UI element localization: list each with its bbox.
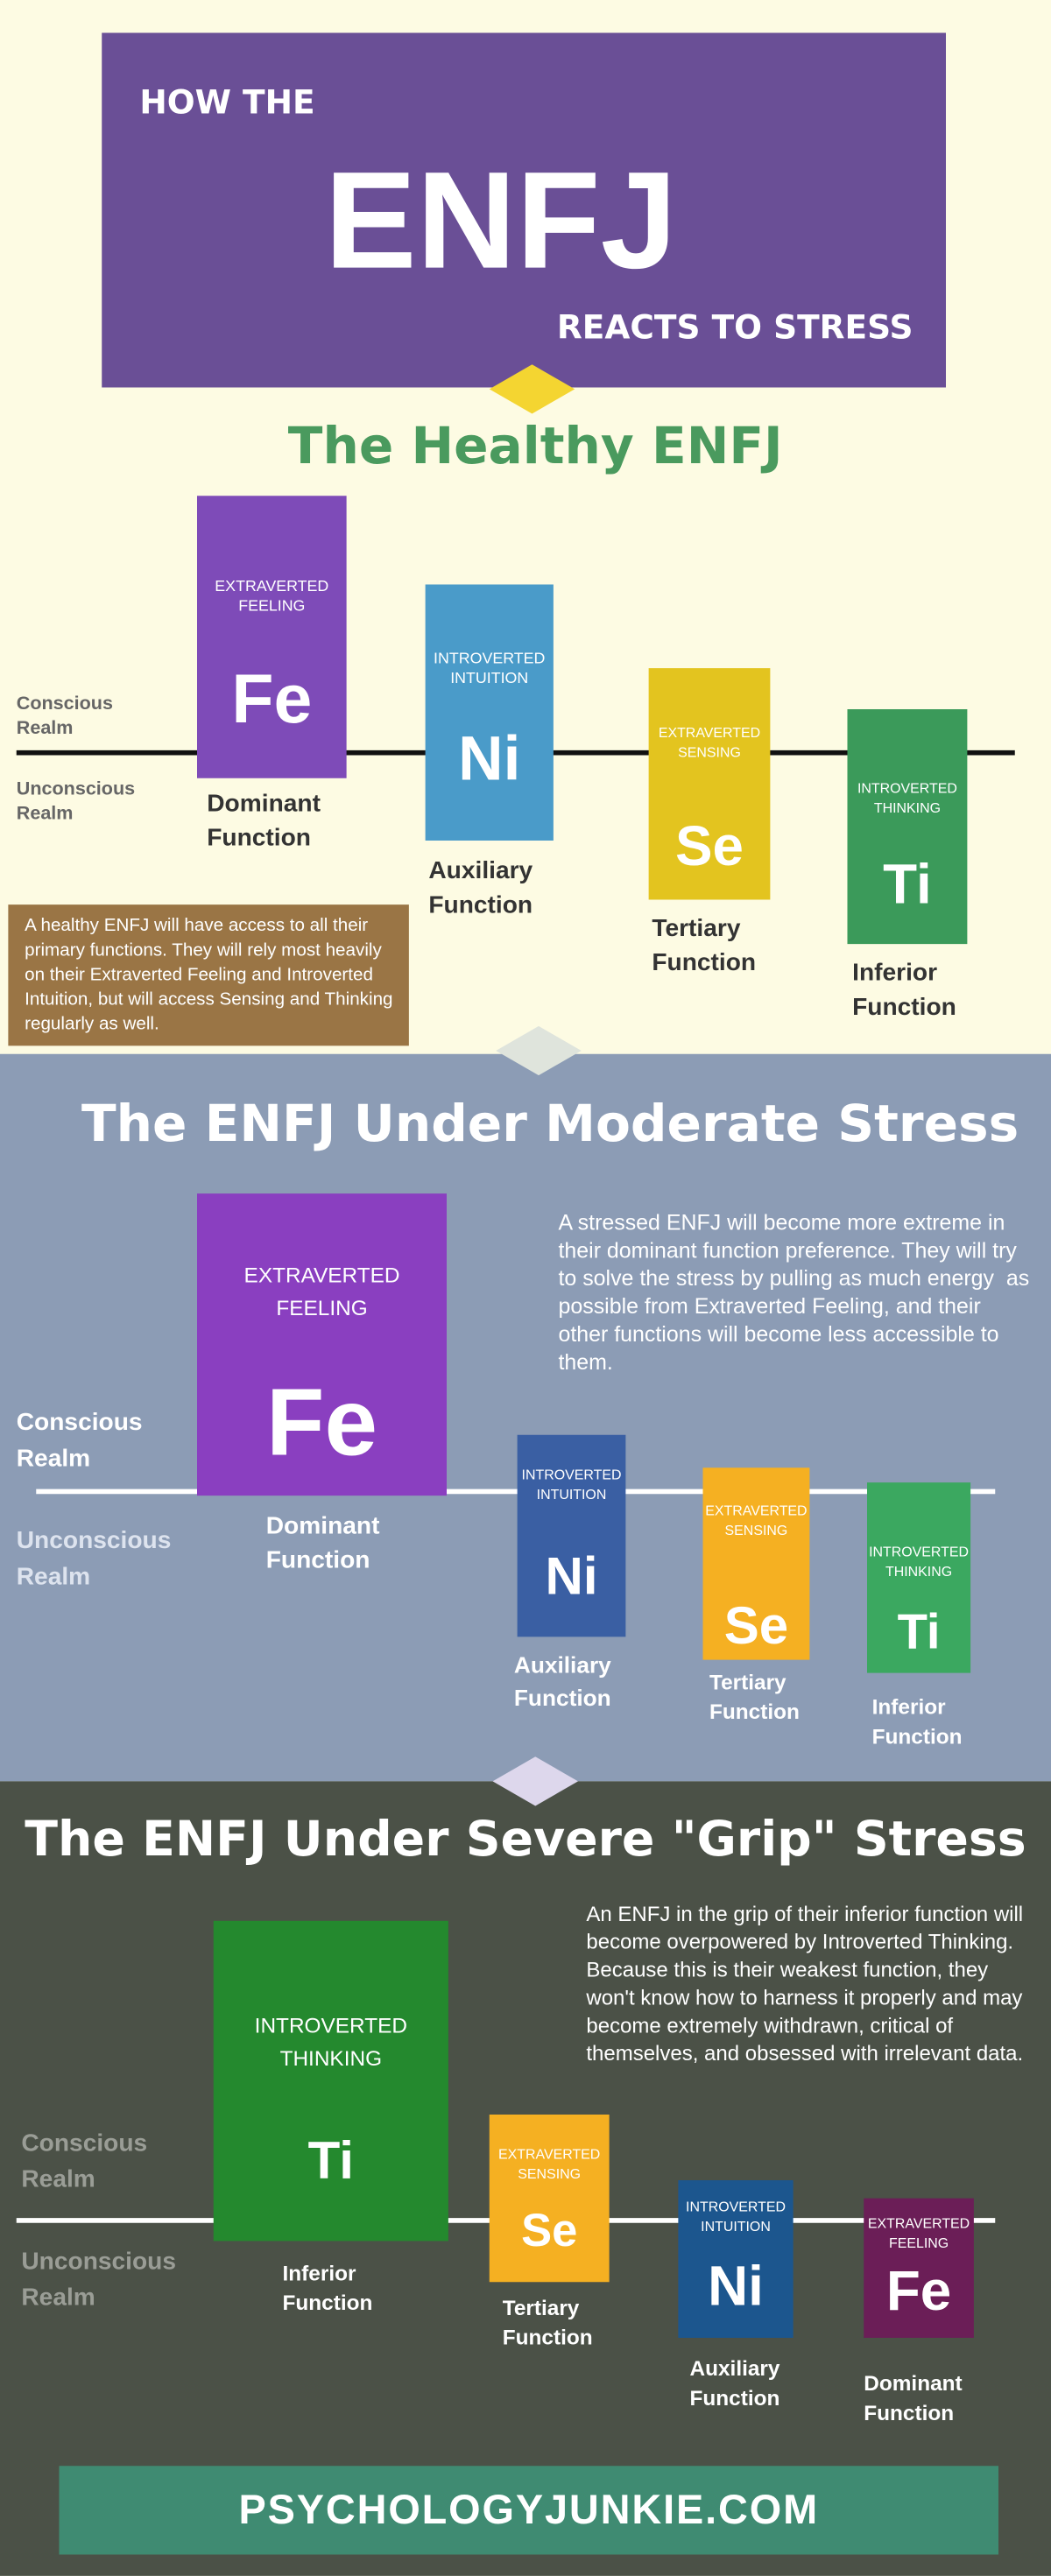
Ni box moderate: INTROVERTED	[522, 1466, 621, 1482]
description grip: An ENFJ in the grip of their inferior function will become overpowered by Introverted Thinking. Because this is their weakest function, they won't know how to harness it properly and may become extremely withdrawn, critical of themselves, and obsessed with irrelevant data.	[586, 1901, 1023, 2066]
Fe box grip: EXTRAVERTED	[868, 2214, 970, 2231]
Ti box healthy	[848, 709, 967, 944]
Se box healthy: EXTRAVERTED	[659, 724, 760, 741]
label tertiary	[652, 914, 756, 977]
Se box moderate: Se	[724, 1595, 788, 1655]
realm grip	[21, 2129, 176, 2312]
Ni box healthy: INTUITION	[450, 670, 528, 688]
Se box healthy	[649, 668, 770, 900]
Ti box grip: INTROVERTED	[255, 2013, 407, 2038]
label auxiliary: Auxiliary	[690, 2356, 779, 2381]
Ti box grip	[214, 1921, 448, 2241]
Ni box grip: Ni	[708, 2256, 764, 2319]
panel: grip stress	[0, 1781, 1051, 2576]
label inferior: Inferior	[872, 1694, 946, 1719]
Ni box grip: INTUITION	[701, 2218, 771, 2235]
Fe box healthy	[197, 496, 347, 778]
diamond yellow	[489, 364, 575, 413]
Ti box healthy: THINKING	[874, 799, 941, 816]
Se box moderate: SENSING	[725, 1522, 787, 1538]
Se box moderate: EXTRAVERTED	[705, 1503, 808, 1518]
title box	[102, 33, 946, 387]
realm grip: Realm	[21, 2165, 95, 2193]
realm moderate: Conscious	[17, 1409, 143, 1437]
realm labels healthy	[17, 694, 135, 824]
label tertiary: Function	[652, 949, 756, 977]
label inferior	[872, 1694, 963, 1749]
label inferior: Function	[282, 2291, 372, 2315]
heading grip: The ENFJ Under Severe "Grip" Stress	[25, 1811, 1026, 1867]
description moderate: A stressed ENFJ will become more extreme in their dominant function preference. They will try to solve the stress by pulling as much energy as possible from Extraverted Feeling, and their other functions will become less accessible to them.	[559, 1210, 1029, 1374]
label inferior: Inferior	[852, 959, 937, 987]
realm labels healthy: Conscious	[17, 694, 113, 714]
realm grip: Conscious	[21, 2129, 147, 2157]
label auxiliary	[514, 1651, 611, 1711]
text box healthy: A healthy ENFJ will have access to all their primary functions. They will rely most heavily on their Extraverted Feeling and Introverted Intuition, but will access Sensing and Thinking regularly as well.	[25, 916, 393, 1034]
label tertiary: Function	[709, 1700, 800, 1724]
label dominant: Function	[864, 2400, 954, 2425]
Se box grip: SENSING	[518, 2165, 581, 2182]
realm labels healthy: Realm	[17, 805, 73, 824]
label dominant	[207, 790, 321, 852]
label inferior: Inferior	[282, 2261, 356, 2285]
Fe box moderate: Fe	[266, 1369, 377, 1476]
Ni box grip	[678, 2180, 794, 2338]
Ni box moderate: INTUITION	[537, 1486, 606, 1503]
label tertiary: Function	[503, 2325, 593, 2349]
Se box healthy: Se	[675, 816, 744, 878]
Ti box moderate: INTROVERTED	[869, 1543, 969, 1559]
title: ENFJ: ENFJ	[325, 143, 677, 297]
Ni box healthy: INTROVERTED	[434, 650, 545, 668]
Fe box healthy: EXTRAVERTED	[215, 578, 328, 596]
label inferior: Function	[872, 1724, 963, 1749]
label tertiary	[503, 2295, 593, 2349]
Se box grip	[490, 2115, 610, 2282]
realm moderate: Realm	[17, 1563, 90, 1591]
title: how the: HOW THE	[139, 82, 315, 122]
label inferior	[852, 959, 956, 1021]
realm labels healthy: Realm	[17, 719, 73, 739]
title: reacts to stress: REACTS TO STRESS	[557, 307, 913, 347]
label dominant: Dominant	[207, 790, 321, 818]
Ni box moderate	[518, 1435, 625, 1636]
panel: moderate stress	[0, 1054, 1051, 1781]
label dominant: Dominant	[266, 1512, 379, 1540]
Ti box moderate	[867, 1482, 970, 1673]
Se box grip: Se	[521, 2205, 577, 2256]
Se box grip: EXTRAVERTED	[498, 2146, 600, 2162]
label auxiliary	[690, 2356, 779, 2410]
label inferior: Function	[852, 993, 956, 1021]
label dominant	[864, 2371, 963, 2425]
label auxiliary: Function	[428, 891, 533, 919]
Fe box moderate: EXTRAVERTED	[244, 1263, 399, 1287]
heading moderate: The ENFJ Under Moderate Stress	[81, 1095, 1019, 1154]
diamond	[496, 1026, 582, 1075]
Ti box grip: THINKING	[280, 2045, 382, 2070]
heading: healthy: The Healthy ENFJ	[288, 417, 783, 476]
label dominant	[266, 1512, 380, 1574]
Ni box healthy	[426, 585, 554, 841]
Fe box grip	[864, 2199, 974, 2338]
footer	[60, 2466, 998, 2555]
label tertiary: Tertiary	[652, 914, 740, 942]
Ni box moderate: Ni	[545, 1546, 597, 1606]
label tertiary: Tertiary	[503, 2295, 579, 2319]
label auxiliary: Function	[514, 1685, 611, 1711]
Ti box grip: Ti	[308, 2131, 354, 2190]
Fe box grip: FEELING	[889, 2235, 949, 2251]
realm moderate	[17, 1409, 171, 1591]
realm grip: Unconscious	[21, 2248, 176, 2276]
Fe box moderate	[197, 1193, 447, 1496]
Ni box healthy: Ni	[458, 726, 520, 795]
Se box healthy: SENSING	[678, 743, 741, 760]
realm moderate: Unconscious	[17, 1527, 171, 1555]
Fe box moderate: FEELING	[276, 1295, 368, 1320]
Ti box moderate: Ti	[898, 1606, 941, 1660]
footer: PSYCHOLOGYJUNKIE.COM	[238, 2488, 819, 2533]
label dominant: Function	[266, 1546, 370, 1574]
realm moderate: Realm	[17, 1445, 90, 1473]
Fe box grip: Fe	[886, 2261, 951, 2323]
realm grip: Realm	[21, 2284, 95, 2312]
label tertiary	[709, 1670, 800, 1724]
label auxiliary	[428, 857, 533, 919]
label dominant: Function	[207, 824, 311, 852]
Ti box moderate: THINKING	[885, 1563, 952, 1580]
label auxiliary: Auxiliary	[514, 1651, 611, 1678]
label inferior	[282, 2261, 372, 2315]
Se box moderate	[702, 1467, 809, 1660]
label auxiliary: Function	[690, 2385, 779, 2410]
Ti box healthy: INTROVERTED	[857, 780, 957, 796]
Ni box grip: INTROVERTED	[686, 2199, 786, 2214]
realm labels healthy: Unconscious	[17, 780, 135, 799]
Fe box healthy: Fe	[231, 660, 312, 737]
Fe box healthy: FEELING	[238, 597, 305, 616]
label auxiliary: Auxiliary	[428, 857, 533, 885]
Ti box healthy: Ti	[883, 854, 932, 916]
label tertiary: Tertiary	[709, 1670, 786, 1694]
diamond	[492, 1756, 578, 1805]
label dominant: Dominant	[864, 2371, 963, 2396]
